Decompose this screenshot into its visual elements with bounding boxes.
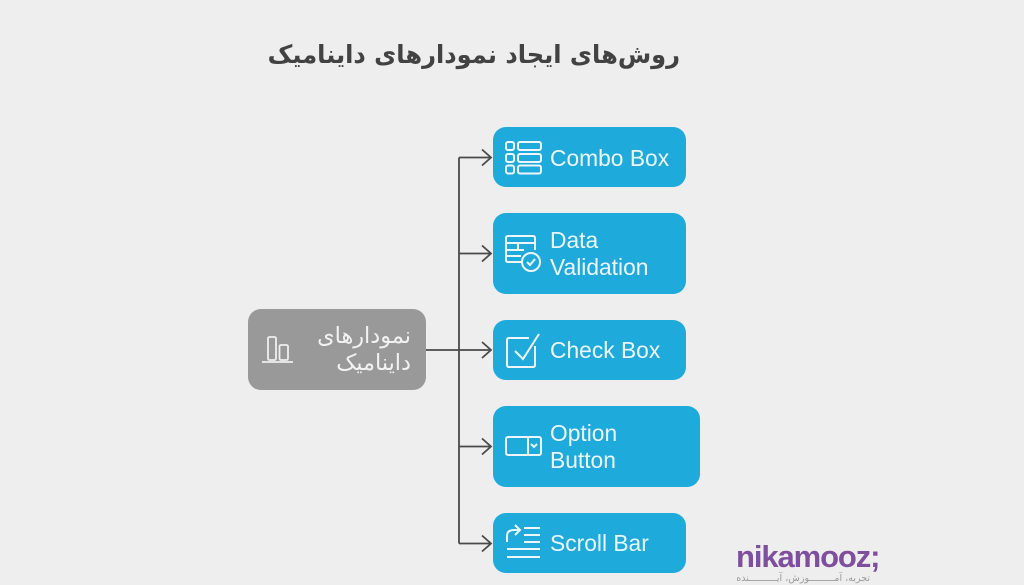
label: Scroll Bar <box>550 530 649 556</box>
label <box>550 227 648 280</box>
icon: bar chart <box>262 336 293 363</box>
icon: scroll lines <box>506 524 540 558</box>
label: Check Box <box>550 337 660 363</box>
label: Option <box>550 420 617 446</box>
logo: nikamooz <box>736 539 879 584</box>
icon: table with check <box>505 235 541 272</box>
item: Scroll Bar <box>493 513 686 573</box>
icon: list <box>505 141 542 174</box>
node label <box>317 323 411 376</box>
label: Combo Box <box>550 145 669 171</box>
central node: dynamic charts <box>248 309 426 390</box>
item: Data Validation <box>493 213 686 294</box>
item: Combo Box <box>493 127 686 187</box>
item: Option Button <box>493 406 700 487</box>
node label: نمودارهای <box>317 323 411 349</box>
icon: dropdown <box>505 436 542 456</box>
logo tagline: تجربه، آمـــــــــوزش، آیــــــــــنده <box>736 573 870 584</box>
title: روش‌های ایجاد نمودارهای داینامیک <box>268 40 680 69</box>
label: Data <box>550 227 598 253</box>
node label: داینامیک <box>336 350 411 376</box>
label <box>550 420 617 473</box>
logo wordmark: nikamooz; <box>736 539 879 574</box>
label: Button <box>550 447 616 473</box>
icon: checkbox <box>506 334 540 368</box>
item: Check Box <box>493 320 686 380</box>
label: Validation <box>550 254 648 280</box>
